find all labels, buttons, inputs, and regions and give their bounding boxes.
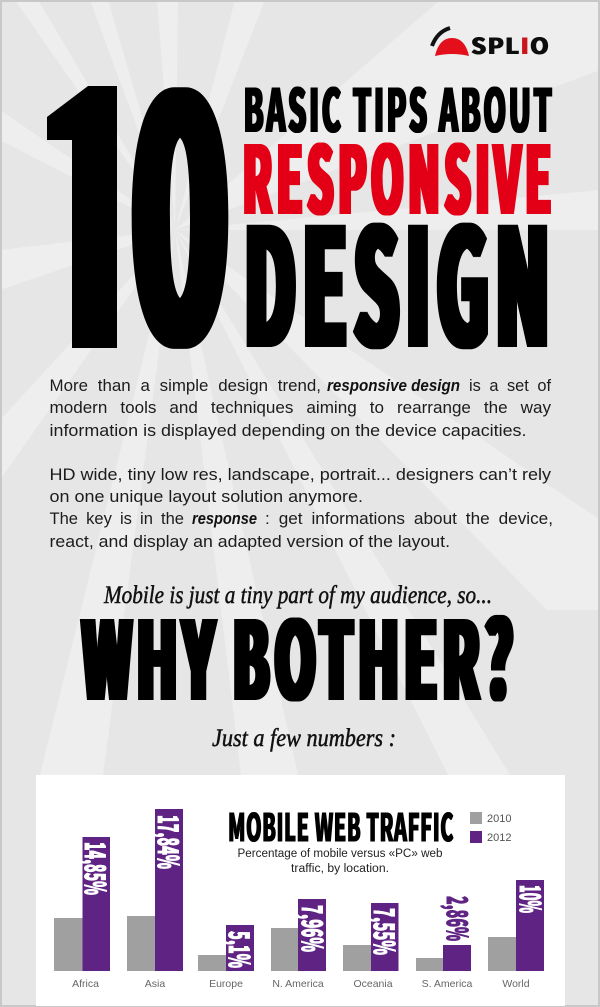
intro text block: responsive design (327, 377, 460, 395)
bar group: World: 10% (511, 885, 551, 913)
logo: Splio: SPLIO (471, 29, 550, 61)
intro text block: is a set of (469, 377, 551, 395)
chart subtitle (238, 848, 442, 875)
legend (470, 812, 511, 844)
bar group: Oceania (343, 903, 405, 990)
intro text block: react, and display an adapted version of the layout. (50, 533, 450, 551)
bar group: S. America: 2,86% (438, 896, 478, 941)
bar group: Africa (54, 837, 116, 990)
bar group: N. America (271, 899, 333, 990)
bar group: Asia: Asia (145, 978, 165, 990)
handwritten lead-in: Mobile is just a tiny part of my audience, so... (103, 582, 492, 609)
intro text block: modern tools and techniques aiming to rearrange the way (50, 399, 552, 417)
intro text block: information is displayed depending on the device capacities. (50, 422, 526, 440)
bar group: Oceania: Oceania (353, 978, 393, 990)
legend: 2010 (487, 813, 511, 825)
bar group: Europe: 5,1% (220, 931, 260, 968)
intro text block: More than a simple design trend, (50, 377, 321, 395)
intro text block: HD wide, tiny low res, landscape, portrait... designers can’t rely (50, 466, 552, 484)
intro text block: : get informations about the device, (265, 510, 553, 528)
bar group: S. America (416, 896, 478, 990)
logo: Splio (432, 28, 550, 61)
bar group: Asia (127, 809, 189, 990)
bar group: Europe (198, 925, 260, 990)
chart subtitle: Percentage of mobile versus «PC» web (238, 848, 442, 860)
bar group: Africa: 14,85% (76, 842, 116, 895)
chart subtitle: traffic, by location. (291, 863, 389, 875)
bar group: Africa: Africa (72, 978, 99, 990)
bar group: World (488, 880, 551, 990)
bar group: N. America: N. America (272, 978, 324, 990)
bar group: Europe: Europe (209, 978, 243, 990)
intro text block: The key is in the (50, 510, 184, 528)
bar group: Asia: 17,84% (149, 815, 189, 869)
intro text block (50, 377, 553, 551)
panel: mobile web traffic chart (36, 775, 565, 1006)
bar group: S. America: S. America (422, 978, 473, 990)
big number 10 (47, 86, 228, 349)
bar group: Oceania: 7,55% (365, 908, 405, 955)
intro text block: response (192, 510, 257, 528)
bar group: N. America: 7,96% (293, 905, 333, 952)
handwritten subheading: Just a few numbers : (212, 725, 396, 752)
legend: 2012 (487, 832, 511, 844)
bar group: World: World (502, 978, 530, 990)
title (242, 63, 556, 395)
intro text block: on one unique layout solution anymore. (50, 488, 363, 506)
